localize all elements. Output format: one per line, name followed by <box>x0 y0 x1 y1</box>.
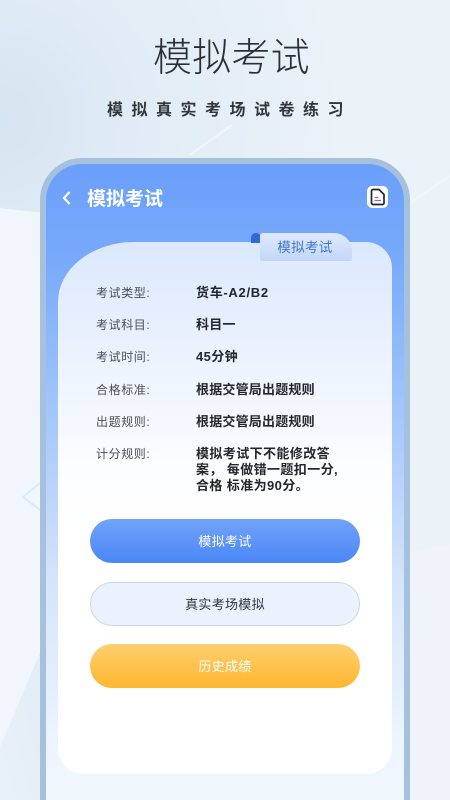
row: scoring rules: 模拟考试下不能修改答 <box>196 446 330 461</box>
tab: mock exam: 模拟考试 <box>277 240 333 255</box>
row: scoring rules <box>96 446 338 493</box>
subtitle: 模拟真实考场试卷练习 <box>107 102 352 119</box>
row: exam type <box>96 285 269 300</box>
main card <box>58 242 392 774</box>
row: pass standard: 合格标准: <box>96 383 150 397</box>
button: real exam simulation <box>90 582 360 626</box>
row: pass standard: 根据交管局出题规则 <box>196 382 315 397</box>
row: pass standard <box>96 382 315 397</box>
row: question rules <box>96 414 315 429</box>
row: subject: 考试科目: <box>96 318 150 332</box>
tab: mock exam <box>260 233 352 261</box>
row: scoring rules: 计分规则: <box>96 447 150 461</box>
button: mock exam <box>90 519 360 563</box>
info rows <box>96 285 338 493</box>
row: exam type: 考试类型: <box>96 286 150 300</box>
row: time: 45分钟 <box>196 349 238 364</box>
row: exam type: 货车-A2/B2 <box>196 285 269 300</box>
back arrow <box>62 191 70 205</box>
row: scoring rules: 案， 每做错一题扣一分, <box>196 462 338 477</box>
row: subject <box>96 317 236 332</box>
tab dot <box>251 233 261 243</box>
row: subject: 科目一 <box>196 317 236 332</box>
row: question rules: 根据交管局出题规则 <box>196 414 315 429</box>
header title: 模拟考试 <box>87 189 163 210</box>
button: mock exam: 模拟考试 <box>198 534 252 549</box>
icon: document <box>367 186 388 208</box>
phone frame <box>40 158 410 800</box>
row: time <box>96 349 238 364</box>
button: history: 历史成绩 <box>198 659 252 674</box>
button: history <box>90 644 360 688</box>
button: real exam simulation: 真实考场模拟 <box>185 597 265 612</box>
row: time: 考试时间: <box>96 350 150 364</box>
row: scoring rules: 合格 标准为90分。 <box>196 478 309 493</box>
row: question rules: 出题规则: <box>96 415 150 429</box>
title: 模拟考试 <box>153 37 310 80</box>
